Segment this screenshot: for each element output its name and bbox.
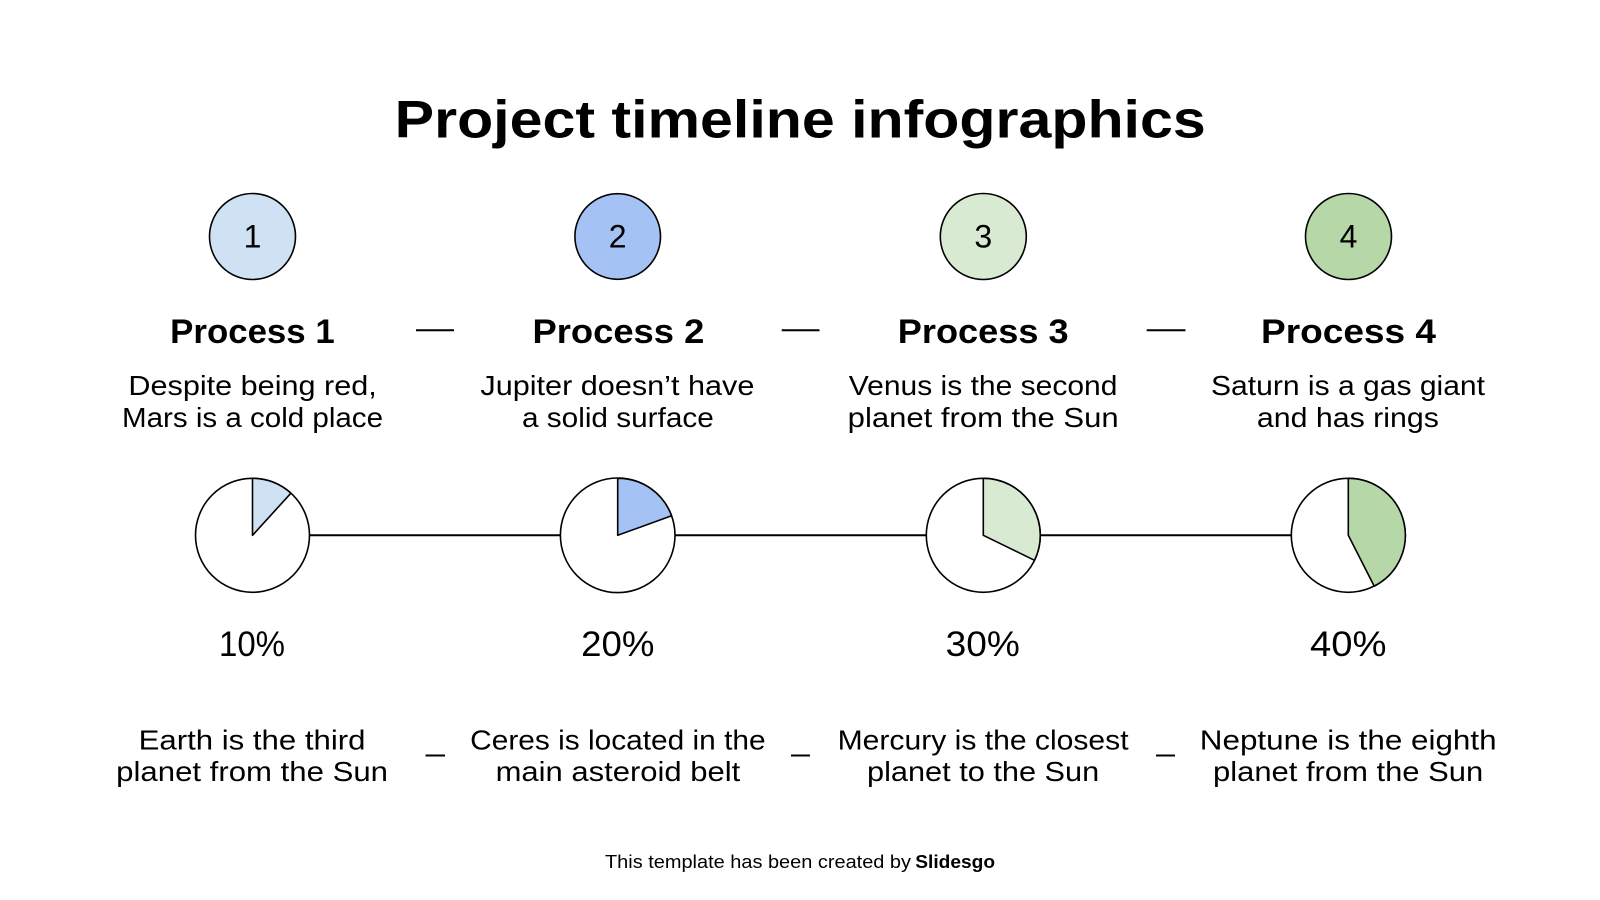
note: neptune: Neptune is the eighth [1200, 724, 1497, 755]
number badge 4 [1306, 194, 1392, 280]
value: 30%: 30% [946, 624, 1020, 664]
number badge 1 [210, 194, 296, 280]
number badge 4: 4 [1340, 218, 1357, 254]
footer credit: Slidesgo [915, 852, 995, 872]
note: earth: Earth is the third [139, 724, 366, 755]
timeline connectors [310, 534, 1292, 536]
description: process 2: a solid surface [522, 402, 714, 433]
note: ceres: main asteroid belt [496, 756, 741, 787]
note: neptune: planet from the Sun [1213, 756, 1483, 787]
description: process 1: Despite being red, [128, 370, 377, 401]
value: 40%: 40% [1310, 624, 1386, 664]
pie chart: 30% [926, 478, 1040, 592]
description: process 1 [122, 370, 383, 433]
pie chart: 20% [560, 478, 675, 593]
description: process 3: planet from the Sun [848, 402, 1119, 433]
note: mercury [838, 724, 1129, 787]
number badge 2 [575, 194, 660, 279]
pie chart: 10% [196, 478, 310, 592]
note: ceres: Ceres is located in the [470, 724, 766, 755]
number badge 3: 3 [974, 218, 992, 254]
note: neptune [1200, 724, 1497, 787]
number badge 2: 2 [609, 218, 627, 254]
note dashes [426, 754, 1175, 756]
heading dashes [416, 329, 1186, 331]
description: process 2 [480, 370, 754, 433]
footer credit: This template has been created by [605, 852, 911, 872]
description: process 3 [848, 370, 1119, 433]
pie chart: 40% [1291, 478, 1405, 592]
description: process 4: and has rings [1257, 402, 1439, 433]
column: process 4 [1200, 194, 1497, 787]
heading: process 3: Process 3 [898, 313, 1069, 351]
note: earth [116, 724, 388, 787]
note: ceres [470, 724, 766, 787]
description: process 4 [1211, 370, 1485, 433]
note: mercury: Mercury is the closest [838, 724, 1129, 755]
column: process 1 [116, 194, 388, 787]
description: process 3: Venus is the second [849, 370, 1117, 401]
number badge 3 [940, 194, 1026, 280]
heading: process 1: Process 1 [170, 313, 335, 351]
column: process 2 [470, 194, 766, 787]
heading: process 2: Process 2 [532, 313, 704, 351]
description: process 2: Jupiter doesn’t have [480, 370, 754, 401]
value: 20%: 20% [581, 624, 654, 664]
description: process 1: Mars is a cold place [122, 402, 383, 433]
column: process 3 [838, 194, 1129, 787]
title: Project timeline infographics [395, 91, 1206, 150]
number badge 1: 1 [244, 218, 261, 254]
description: process 4: Saturn is a gas giant [1211, 370, 1485, 401]
value: 10%: 10% [219, 624, 285, 664]
heading: process 4: Process 4 [1261, 313, 1436, 351]
note: mercury: planet to the Sun [867, 756, 1099, 787]
note: earth: planet from the Sun [116, 756, 388, 787]
